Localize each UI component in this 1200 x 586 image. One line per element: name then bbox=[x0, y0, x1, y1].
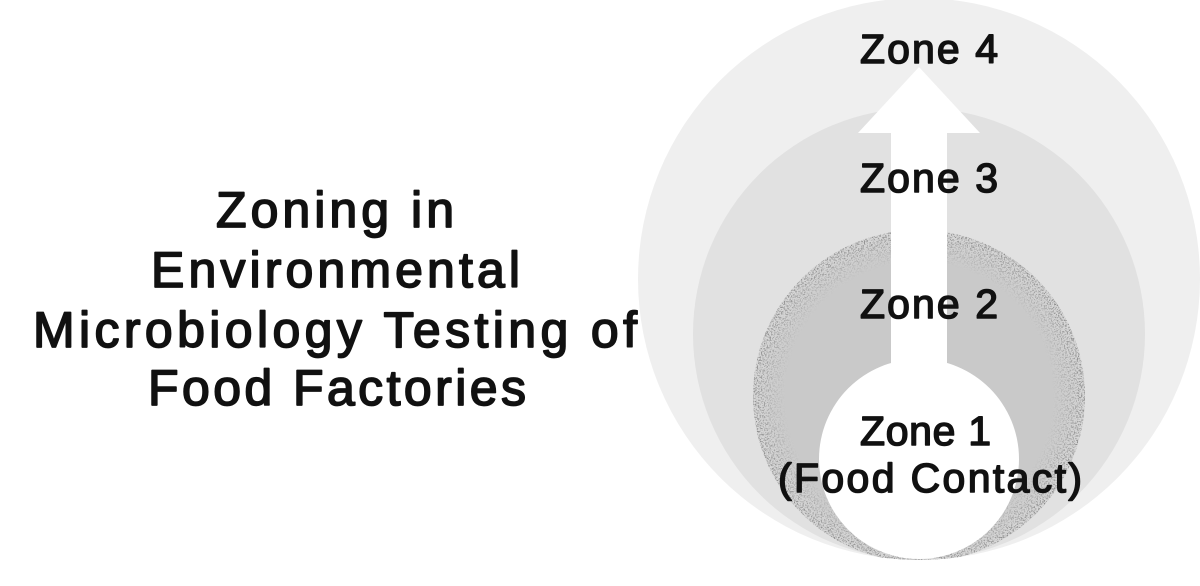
label: zone 1: (Food Contact) bbox=[778, 455, 1082, 501]
title: Zoning in bbox=[216, 182, 454, 238]
title: Food Factories bbox=[148, 360, 526, 416]
title: Microbiology Testing of bbox=[33, 302, 637, 358]
label: zone 3: Zone 3 bbox=[860, 155, 998, 201]
title bbox=[33, 182, 637, 416]
label: zone 1: Zone 1 bbox=[860, 408, 991, 454]
zone diagram bbox=[638, 0, 1200, 564]
title: Environmental bbox=[151, 242, 520, 298]
zone 1 circle bbox=[819, 359, 1019, 559]
label: zone 1 bbox=[778, 408, 1082, 501]
zone 3 circle bbox=[693, 108, 1145, 560]
label: zone 2: Zone 2 bbox=[860, 281, 998, 327]
arrow bbox=[858, 67, 980, 375]
label: zone 4: Zone 4 bbox=[860, 26, 998, 72]
zone 2 circle bbox=[750, 228, 1090, 564]
zone 4 circle bbox=[638, 0, 1200, 560]
